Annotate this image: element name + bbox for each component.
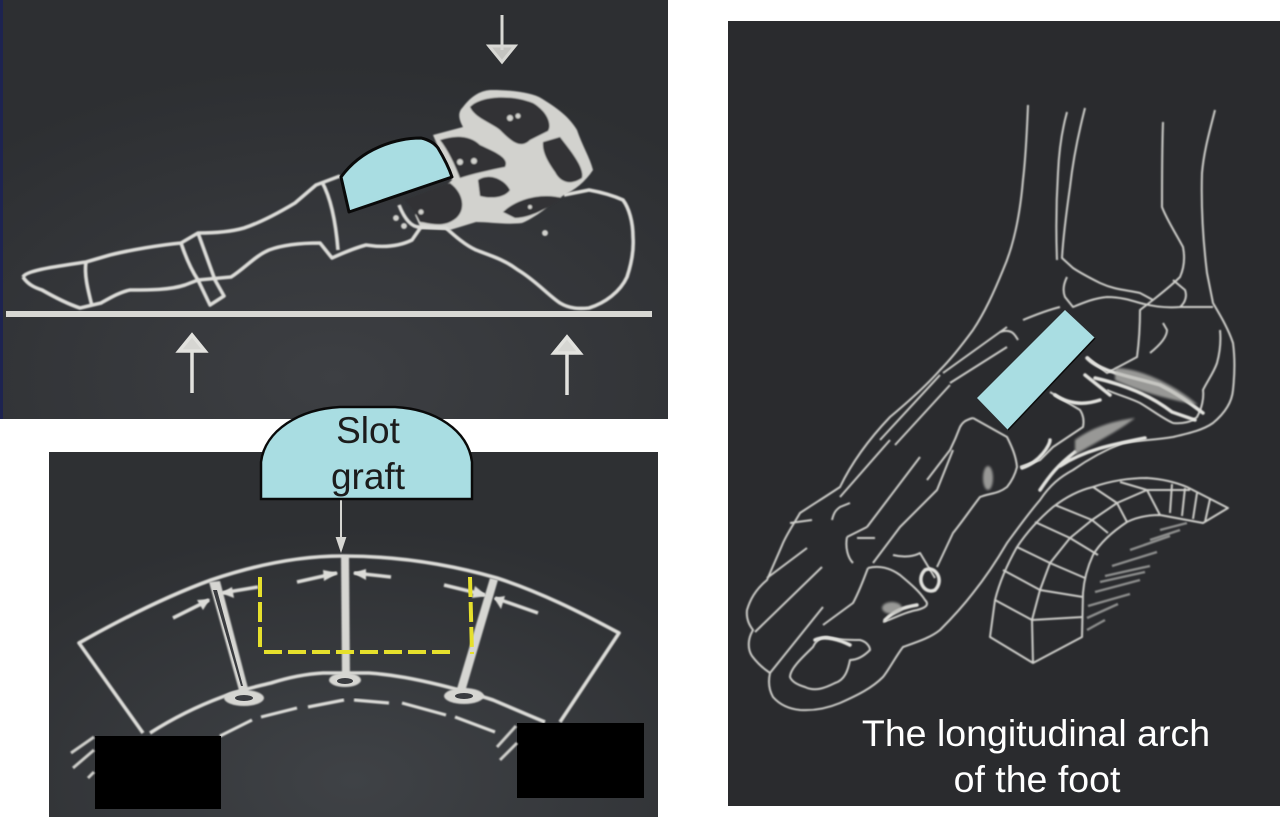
dorsal tendons [1023,307,1060,320]
lower dashed arrows [220,700,495,736]
yellow dashed cut [260,577,472,654]
tibia and fibula [1056,112,1067,260]
arch outline [79,556,619,733]
foot bones outline [23,176,633,308]
slot graft shape: graft [331,456,406,497]
arrow up right [554,337,580,395]
slot graft shape [261,407,472,499]
phalanx joints [85,262,92,306]
graft wedge [341,138,452,212]
hatch marks [71,726,517,778]
panel: foot side skeleton [0,0,668,419]
right support [517,723,644,798]
slot graft stem arrow [337,500,345,550]
tarsals [927,418,973,480]
compression arrows [173,573,538,618]
hallux bone [790,637,870,689]
skin outline [747,105,1234,710]
arch model hatching [1087,523,1187,630]
panel: longitudinal arch of foot: of the foot [954,758,1121,800]
panel: longitudinal arch of foot [728,21,1280,806]
panel: arch diagram [49,452,658,817]
leg and foot line art [747,105,1234,710]
metatarsal base [322,182,338,250]
wedge cuts [209,556,498,706]
ankle bones [1064,277,1186,307]
ground line [6,311,652,317]
arch segmented model [990,478,1228,663]
caption: The longitudinal arch [862,712,1210,754]
arrow up left [179,335,205,393]
arrow down [489,15,515,62]
tarsal bone mass [393,90,593,236]
left support [95,736,221,809]
bright bone shading [815,358,1203,645]
graft block [977,310,1095,430]
metatarsals and toes [832,440,920,563]
slot graft label: Slot [336,410,401,451]
